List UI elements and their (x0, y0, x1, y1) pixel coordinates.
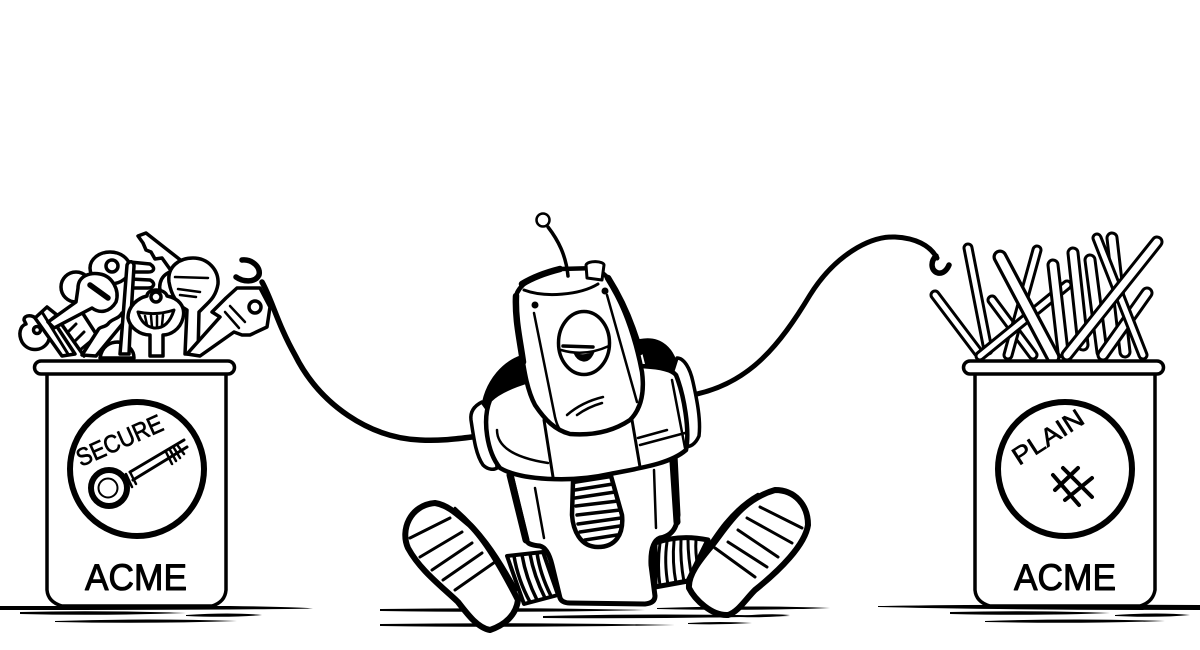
right cable (697, 237, 937, 394)
ACME label: ACME (1014, 557, 1116, 598)
tall oval key (169, 258, 218, 354)
robot (405, 214, 808, 630)
torso dome (486, 366, 687, 479)
torso stripes (638, 430, 685, 445)
left shoulder pad (471, 402, 497, 469)
head knob (586, 262, 604, 280)
rounded bars behind (130, 262, 154, 288)
torso panel (544, 420, 640, 477)
spring right leg (655, 538, 708, 587)
antenna (536, 214, 568, 276)
ACME label: ACME (85, 557, 187, 598)
grin key (128, 290, 184, 356)
head shading (516, 269, 640, 362)
right shoulder pad (670, 358, 700, 447)
left cable (262, 282, 472, 440)
label circle (70, 402, 204, 536)
right hook (932, 256, 949, 273)
head side lines (534, 295, 637, 433)
round key with hole (90, 252, 130, 284)
belly stripes (572, 476, 622, 547)
right jar (964, 361, 1164, 606)
key icon (91, 440, 187, 506)
jar rim (34, 361, 234, 374)
jar rim (964, 361, 1164, 374)
left foot (405, 503, 518, 630)
label circle (998, 402, 1132, 536)
body shading (510, 462, 677, 540)
top toothed key (138, 233, 183, 272)
left hook (236, 260, 259, 281)
hatched blade (60, 306, 100, 356)
dome shoulder lines (672, 380, 685, 448)
plain sticks (935, 238, 1157, 357)
left jar (34, 361, 234, 606)
mouth (567, 397, 603, 415)
ground lines (0, 605, 1200, 627)
PLAIN label: PLAIN (1007, 404, 1089, 471)
body lower (510, 455, 678, 604)
jar body (975, 372, 1155, 606)
head top ellipse (524, 284, 598, 295)
hex key (187, 288, 270, 356)
long jagged key (82, 313, 124, 356)
left toothed blade (35, 307, 75, 356)
rivets (532, 288, 608, 308)
slotted head key (48, 272, 117, 328)
left small key (20, 316, 50, 350)
shoulder shadows (483, 339, 678, 410)
right foot (689, 490, 808, 615)
lower ring key (100, 342, 134, 358)
bump behind oval key (160, 272, 180, 300)
body highlights (535, 470, 656, 538)
hash icon (1053, 468, 1092, 505)
jar body (47, 372, 226, 606)
head (516, 268, 643, 434)
spring left leg (507, 552, 558, 604)
vertical thin key (120, 262, 134, 354)
SECURE label: SECURE (72, 409, 167, 472)
keys pile (20, 233, 270, 358)
eye (558, 312, 610, 374)
